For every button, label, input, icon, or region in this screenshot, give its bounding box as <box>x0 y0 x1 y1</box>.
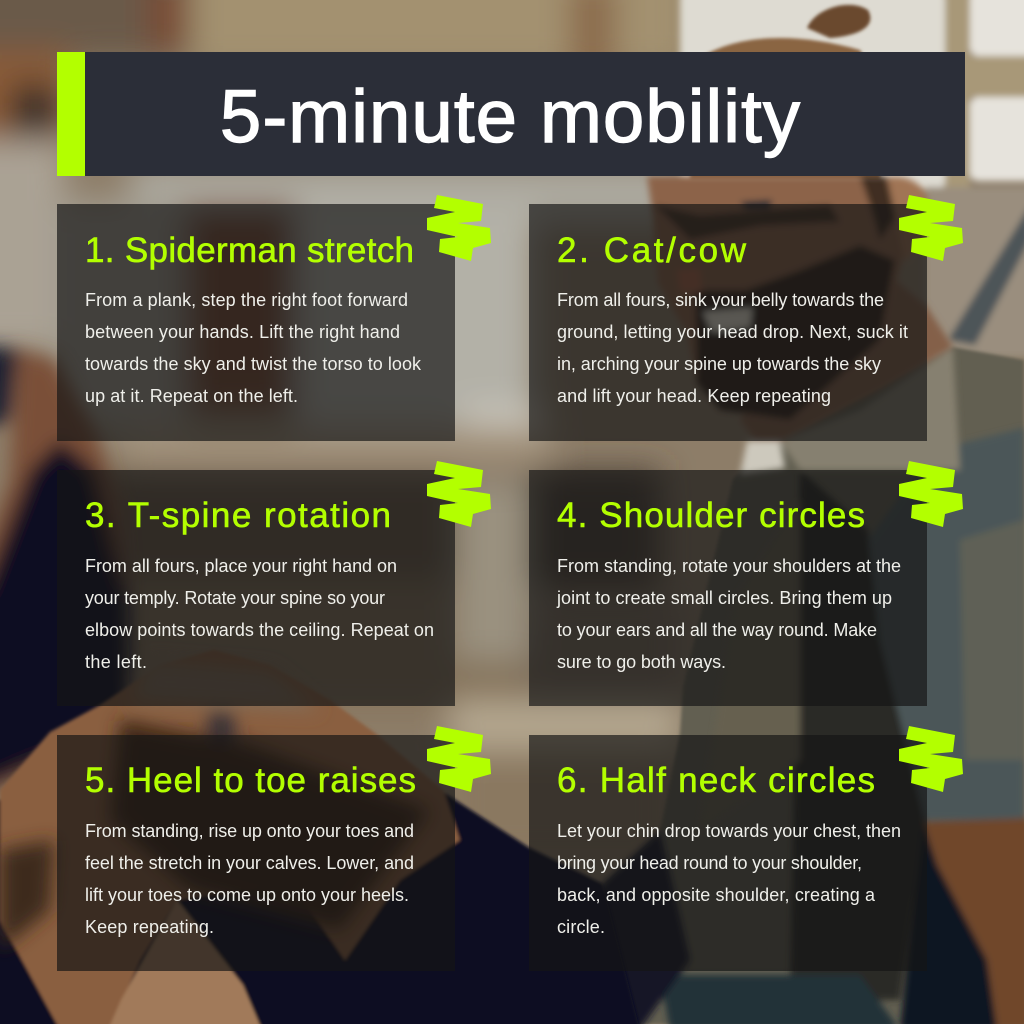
heading: 2. Cat/cow <box>557 231 747 270</box>
heading: 5. Heel to toe raises <box>85 761 416 800</box>
title accent bar <box>57 52 85 176</box>
body text <box>85 821 414 937</box>
body text: joint to create small circles. Bring them up <box>556 588 892 608</box>
body text: bring your head round to your shoulder, <box>557 853 862 873</box>
face <box>647 176 905 420</box>
icon: zigzag <box>427 461 491 527</box>
body text: towards the sky and twist the torso to look <box>85 354 422 374</box>
heading: 1. Spiderman stretch <box>85 231 414 270</box>
icon: zigzag <box>427 195 491 261</box>
heading: 3. T-spine rotation <box>85 496 391 535</box>
body text: back, and opposite shoulder, creating a <box>557 885 876 905</box>
body text: From a plank, step the right foot forward <box>85 290 408 310</box>
torso shirt <box>600 347 1024 1024</box>
body text: and lift your head. Keep repeating <box>557 386 831 406</box>
body text: sure to go both ways. <box>557 652 726 672</box>
neck <box>740 250 953 450</box>
panel: t-spine rotation <box>57 461 491 706</box>
body text: in, arching your spine up towards the sky <box>557 354 881 374</box>
body text: to your ears and all the way round. Make <box>557 620 877 640</box>
panel: shoulder circles <box>529 461 963 706</box>
left seated person <box>0 345 130 800</box>
body text: From standing, rotate your shoulders at the <box>557 556 901 576</box>
body text: elbow points towards the ceiling. Repeat on <box>85 620 434 640</box>
man head and torso <box>600 5 1024 1024</box>
body text <box>556 556 901 672</box>
icon: zigzag <box>427 726 491 792</box>
panel: cat/cow <box>529 195 963 441</box>
body text: From all fours, sink your belly towards the <box>557 290 884 310</box>
knee and legs with shorts <box>0 650 640 1024</box>
title: 5-minute mobility <box>220 75 800 158</box>
panel: spiderman stretch <box>57 195 491 441</box>
body text: up at it. Repeat on the left. <box>85 386 298 406</box>
body text: lift your toes to come up onto your heels. <box>85 885 409 905</box>
icon: zigzag <box>899 195 963 261</box>
window panes <box>680 0 1024 357</box>
body text: feel the stretch in your calves. Lower, and <box>85 853 414 873</box>
body text: circle. <box>557 917 605 937</box>
beard <box>695 245 895 420</box>
panel: half neck circles <box>529 726 963 971</box>
body text: Keep repeating. <box>85 917 214 937</box>
body text: between your hands. Lift the right hand <box>85 322 400 342</box>
body text <box>85 556 434 672</box>
body text: From all fours, place your right hand on <box>85 556 397 576</box>
body text <box>557 290 908 406</box>
body text: Let your chin drop towards your chest, then <box>557 821 901 841</box>
body text <box>557 821 901 937</box>
body text: From standing, rise up onto your toes and <box>85 821 414 841</box>
heading: 6. Half neck circles <box>557 761 875 800</box>
icon: zigzag <box>899 726 963 792</box>
body text: your temply. Rotate your spine so your <box>85 588 385 608</box>
title banner <box>57 52 965 176</box>
icon: zigzag <box>899 461 963 527</box>
panel: heel to toe raises <box>57 726 491 971</box>
body text <box>85 290 422 406</box>
body text: the left. <box>85 652 147 672</box>
body text: ground, letting your head drop. Next, suck it <box>557 322 908 342</box>
heading: 4. Shoulder circles <box>557 496 865 535</box>
